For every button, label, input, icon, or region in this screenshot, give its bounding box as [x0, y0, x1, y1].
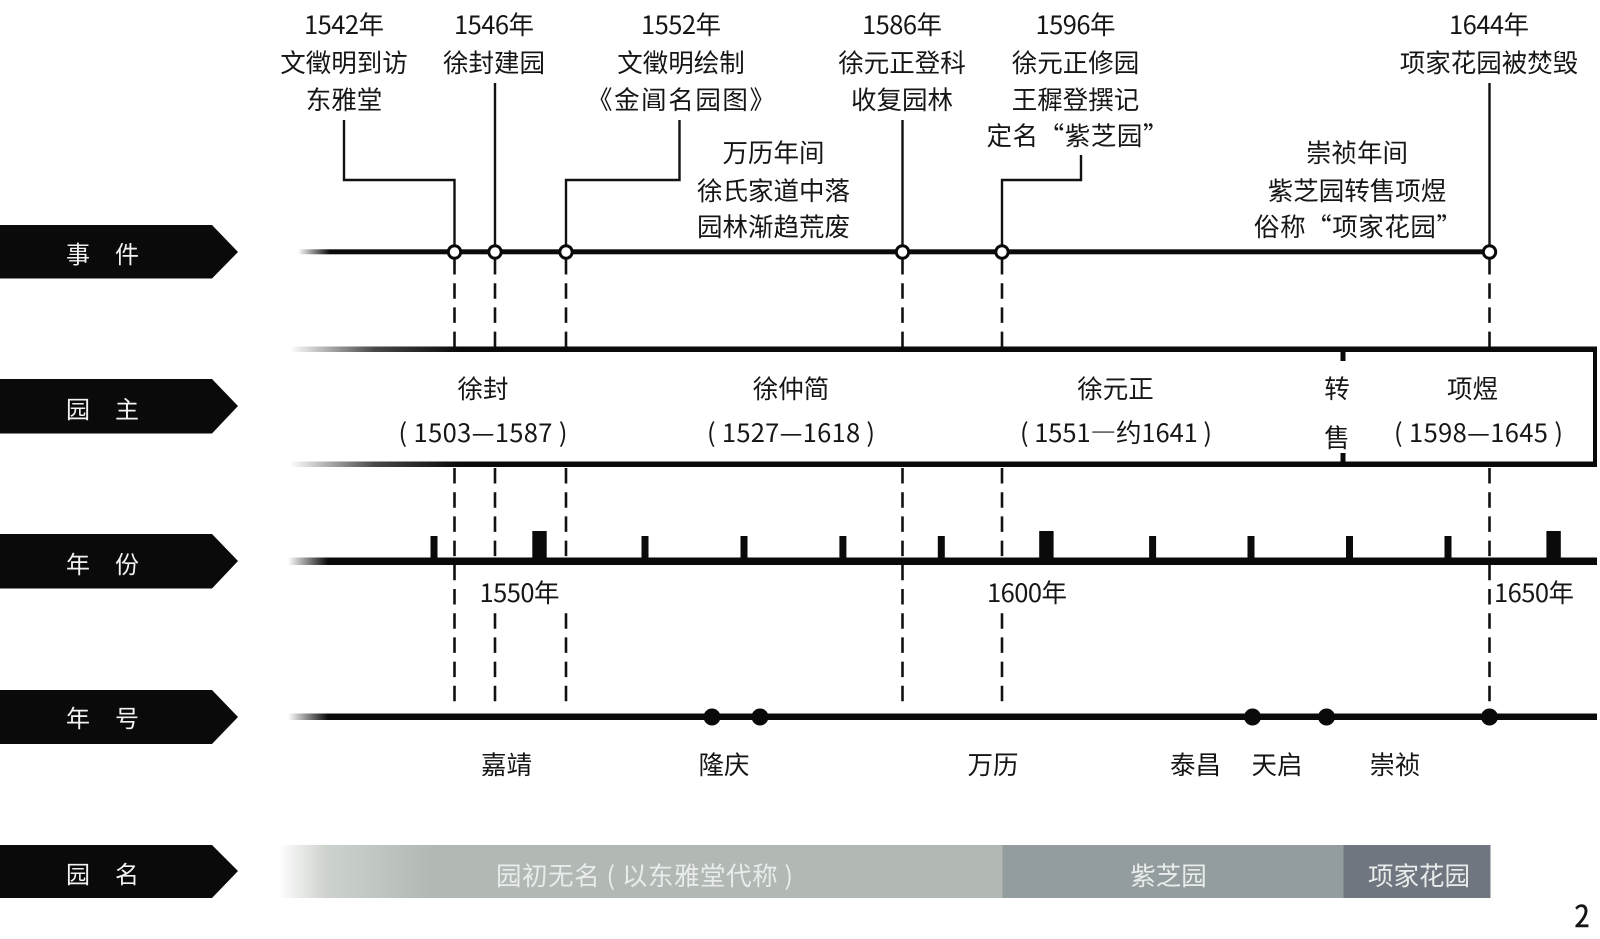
row label: 年号: 年	[66, 699, 90, 734]
owner: 徐仲简: 徐仲简	[753, 369, 829, 406]
note: 崇祯年间: 崇祯年间	[1306, 133, 1408, 170]
reign: 嘉靖: 嘉靖	[481, 745, 532, 782]
owner: 项煜	[1394, 369, 1563, 450]
event 1546: 徐封建园: 徐封建园	[443, 43, 545, 80]
owner: 项煜: ( 1598—1645 )	[1394, 413, 1563, 450]
garden name segment: 紫芝园: 紫芝园	[1130, 856, 1207, 893]
transfer: 转售: 转	[1324, 369, 1350, 406]
year label 1550: 1550年	[480, 573, 560, 610]
garden name segment: 园初无名: 园初无名 ( 以东雅堂代称 )	[496, 856, 793, 893]
event 1644: 项家花园被焚毁	[1400, 5, 1578, 258]
event 1596: 徐元正修园: 王穉登撰记	[1012, 80, 1139, 117]
reign: 天启: 天启	[1251, 745, 1303, 782]
event 1586: 徐元正登科收复园林: 徐元正登科	[838, 43, 966, 80]
event 1552: 文徵明绘制《金阊名园图》: 《金阊名园图》	[587, 80, 775, 117]
owner: 项煜: 项煜	[1447, 369, 1498, 406]
row label: 年号	[0, 690, 238, 744]
row label: 事件	[0, 225, 238, 278]
event 1596: 徐元正修园	[986, 5, 1168, 258]
year label 1650: 1650年	[1494, 573, 1574, 610]
row label: 年份: 年	[66, 545, 90, 580]
owner: 徐元正: ( 1551—约1641 )	[1020, 413, 1212, 450]
row label: 年份: 份	[115, 545, 139, 580]
note: 万历年间: 万历年间	[722, 133, 825, 170]
owner band frame	[291, 346, 1597, 467]
event 1586: 徐元正登科收复园林: 收复园林	[851, 80, 953, 117]
event timeline axis	[298, 249, 1489, 254]
event 1586: 徐元正登科收复园林: 1586年	[862, 5, 942, 42]
garden name segment: 项家花园: 项家花园	[1368, 856, 1470, 893]
reign axis with dots	[288, 708, 1597, 726]
event 1542: 文徵明到访东雅堂	[280, 5, 461, 258]
reign: 泰昌: 泰昌	[1170, 745, 1221, 782]
event 1552: 文徵明绘制《金阊名园图》: 文徵明绘制	[617, 43, 745, 80]
event 1596: 徐元正修园: 徐元正修园	[1012, 43, 1139, 80]
reign: 隆庆: 隆庆	[698, 745, 750, 782]
event 1542: 文徵明到访东雅堂: 1542年	[304, 5, 384, 42]
owner: 徐封: ( 1503—1587 )	[398, 413, 568, 450]
event 1596: 徐元正修园: 定名“紫芝园”	[986, 116, 1168, 153]
row label: 年份	[0, 534, 238, 588]
note: 崇祯年间: 俗称“项家花园”	[1254, 207, 1462, 244]
row label: 园名: 园	[66, 855, 90, 890]
year label 1600: 1600年	[987, 573, 1067, 610]
row label: 事件: 件	[115, 235, 139, 270]
note: 万历年间	[697, 133, 850, 244]
owner: 徐元正	[1020, 369, 1212, 450]
reign: 万历: 万历	[967, 745, 1019, 782]
event 1596: 徐元正修园: 1596年	[1036, 5, 1116, 42]
event 1644: 项家花园被焚毁: 项家花园被焚毁	[1400, 43, 1578, 80]
note: 万历年间: 园林渐趋荒废	[697, 207, 850, 244]
owner: 徐封	[398, 369, 568, 450]
note: 万历年间: 徐氏家道中落	[697, 171, 850, 208]
transfer: 转售	[1324, 369, 1350, 455]
event 1542: 文徵明到访东雅堂: 东雅堂	[306, 80, 382, 117]
row label: 事件: 事	[66, 235, 90, 270]
event 1546: 徐封建园	[443, 5, 545, 258]
garden name segment: 园初无名	[278, 845, 1002, 898]
owner: 徐仲简: ( 1527—1618 )	[707, 413, 875, 450]
row label: 园名: 名	[115, 855, 139, 890]
dashed guide lines between rows	[454, 259, 1490, 703]
note: 崇祯年间: 紫芝园转售项煜	[1268, 171, 1446, 208]
event 1552: 文徵明绘制《金阊名园图》	[560, 5, 775, 258]
event 1586: 徐元正登科收复园林	[838, 5, 966, 258]
row label: 园主: 主	[115, 390, 139, 425]
row label: 园名	[0, 845, 238, 898]
event 1546: 徐封建园: 1546年	[454, 5, 534, 42]
owner: 徐封: 徐封	[457, 369, 509, 406]
owner: 徐仲简	[707, 369, 875, 450]
reign: 崇祯: 崇祯	[1369, 745, 1421, 782]
transfer: 转售: 售	[1324, 418, 1350, 455]
owner: 徐元正: 徐元正	[1077, 369, 1154, 406]
event 1644: 项家花园被焚毁: 1644年	[1449, 5, 1529, 42]
row label: 年号: 号	[115, 699, 139, 734]
note: 崇祯年间	[1254, 133, 1462, 244]
row label: 园主: 园	[66, 390, 90, 425]
event 1552: 文徵明绘制《金阊名园图》: 1552年	[641, 5, 721, 42]
row label: 园主	[0, 379, 238, 434]
garden name segment: 项家花园	[1344, 845, 1490, 898]
page number: 2	[1574, 892, 1590, 936]
event 1542: 文徵明到访东雅堂: 文徵明到访	[280, 43, 408, 80]
garden name segment: 紫芝园	[1002, 845, 1344, 898]
year axis with ticks	[288, 531, 1597, 565]
